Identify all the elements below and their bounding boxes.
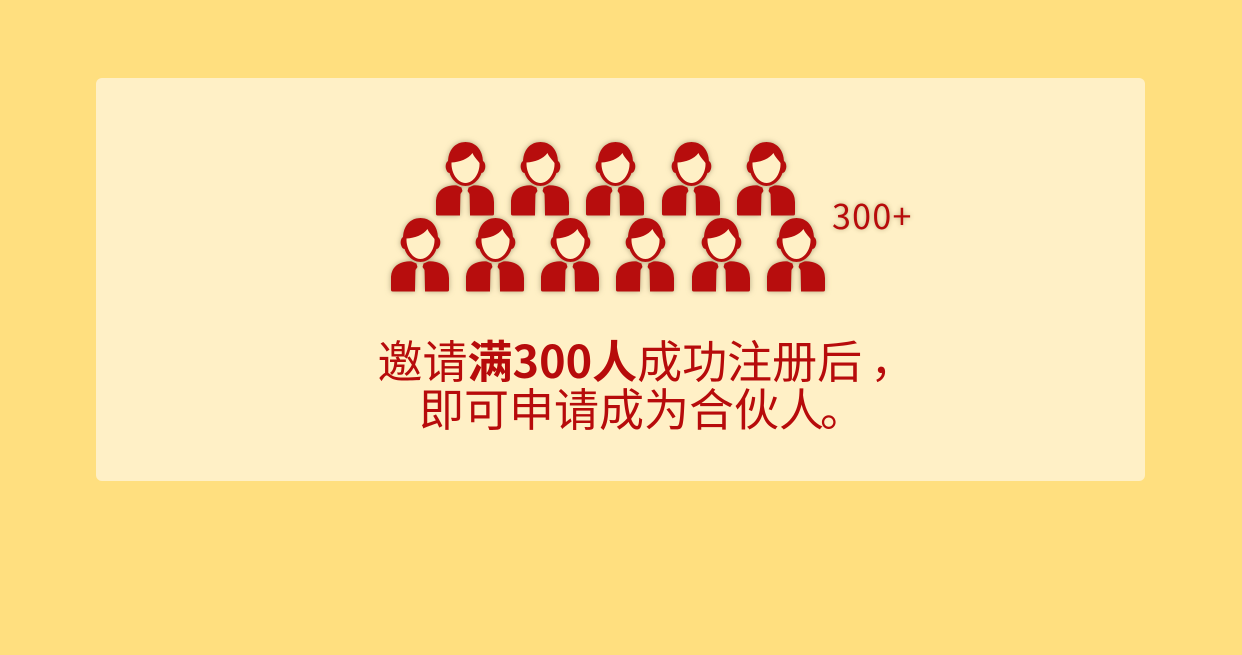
label: 300+ count: 300+	[832, 190, 913, 239]
headline text: 邀请满300人成功注册后，	[378, 324, 915, 390]
panel: invitation card	[96, 78, 1145, 481]
top row of people	[436, 142, 795, 216]
headline text: 即可申请成为合伙人。	[419, 374, 865, 438]
bottom row of people	[391, 218, 825, 292]
